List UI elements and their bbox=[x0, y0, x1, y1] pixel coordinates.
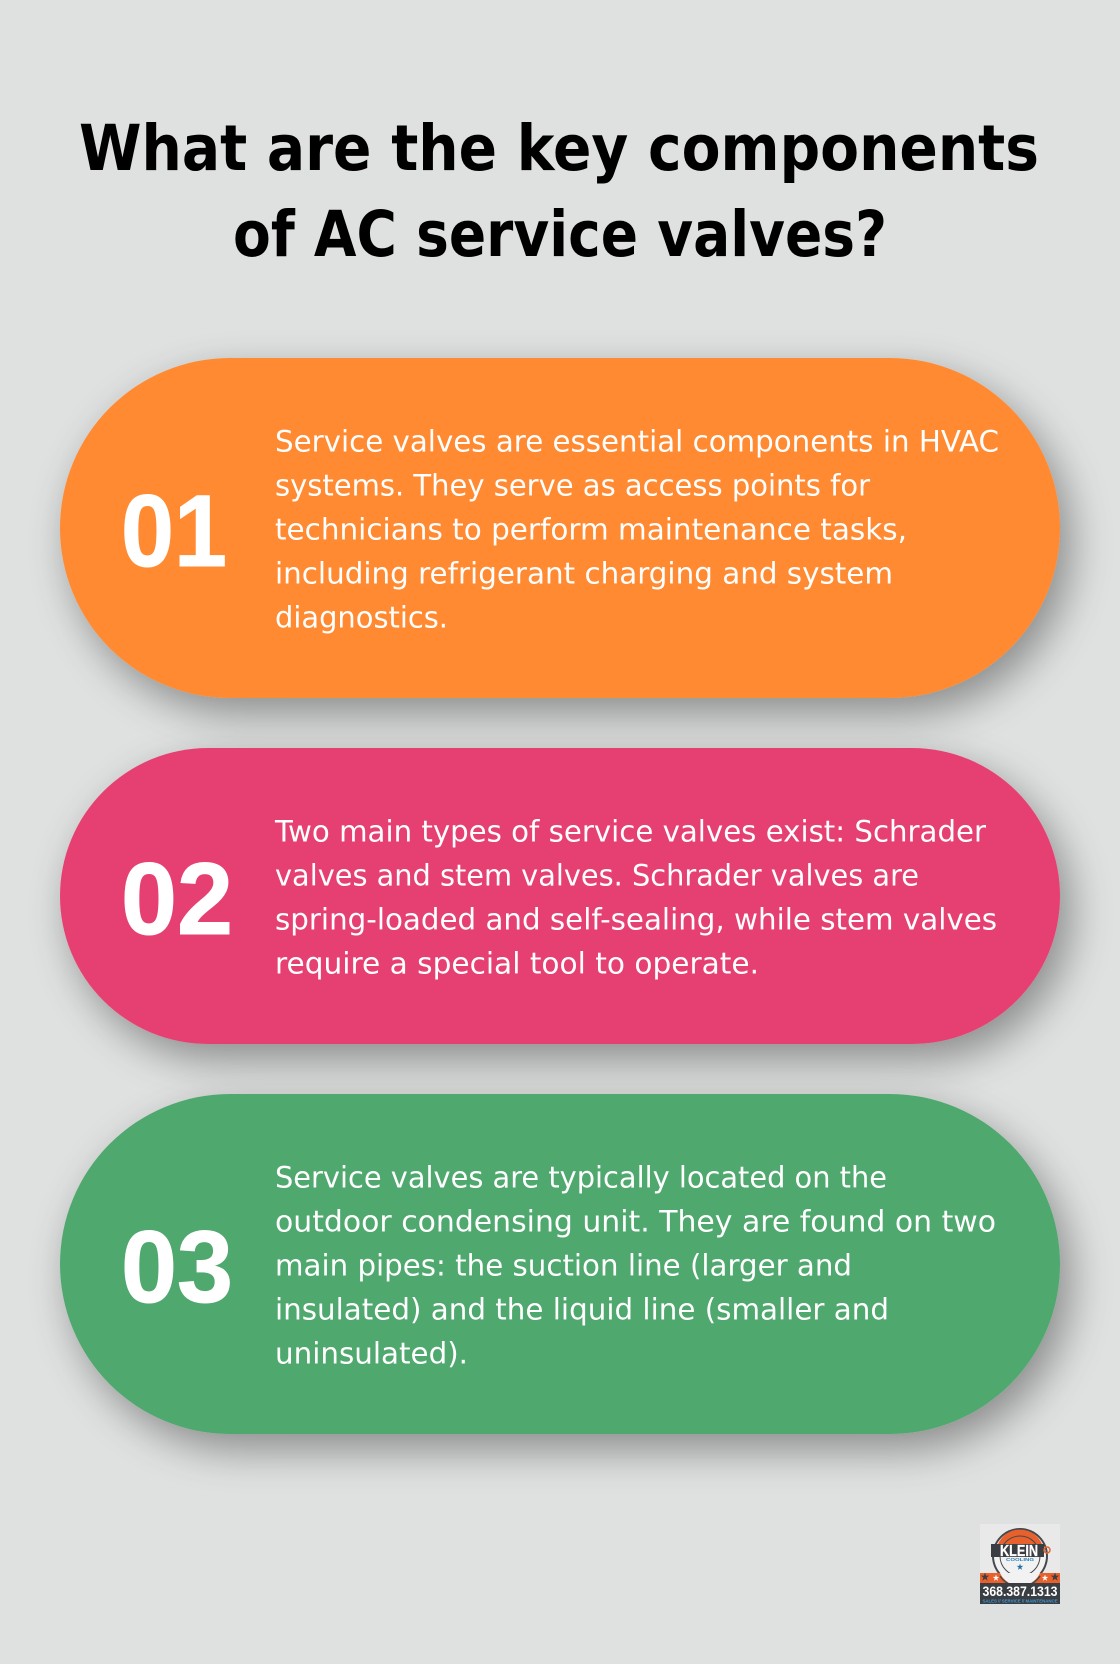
text block: step 01: systems. They serve as access points for bbox=[275, 468, 870, 502]
icon: company logo: 368.387.1313 bbox=[982, 1584, 1058, 1599]
panel: step 03 bbox=[60, 1094, 1060, 1434]
text block: step 03 bbox=[275, 1160, 996, 1370]
text block: step 01 bbox=[275, 424, 999, 634]
text block: step 02 bbox=[274, 814, 997, 980]
number 02: 02 bbox=[121, 842, 233, 956]
icon: company logo: KLEIN bbox=[1000, 1543, 1038, 1560]
text block: step 01: Service valves are essential components in HVAC bbox=[275, 424, 999, 458]
text block: step 03: main pipes: the suction line (larger and bbox=[275, 1248, 852, 1282]
text block: step 02: valves and stem valves. Schrader valves are bbox=[275, 858, 919, 892]
text block: step 01: including refrigerant charging and system bbox=[275, 556, 893, 590]
text block: step 03: outdoor condensing unit. They are found on two bbox=[275, 1204, 996, 1238]
text block: step 03: Service valves are typically located on the bbox=[275, 1160, 887, 1194]
text block: step 02: spring-loaded and self-sealing, while stem valves bbox=[275, 902, 997, 936]
text block: step 03: insulated) and the liquid line (smaller and bbox=[275, 1292, 889, 1326]
icon: company logo: SALES // SERVICE // MAINTENANCE bbox=[982, 1598, 1058, 1604]
text block: step 02: Two main types of service valves exist: Schrader bbox=[274, 814, 986, 848]
panel: step 02 bbox=[60, 748, 1060, 1044]
text block: step 01: diagnostics. bbox=[275, 600, 448, 634]
number 03: 03 bbox=[121, 1210, 233, 1324]
text block: step 02: require a special tool to operate. bbox=[275, 946, 759, 980]
number 01: 01 bbox=[121, 474, 227, 588]
icon: company logo bbox=[980, 1524, 1060, 1604]
icon: company logo: COOLING bbox=[1006, 1557, 1035, 1562]
title: of AC service valves? bbox=[233, 198, 887, 271]
text block: step 01: technicians to perform maintenance tasks, bbox=[275, 512, 907, 546]
title bbox=[79, 112, 1039, 271]
title: What are the key components bbox=[79, 112, 1039, 185]
panel: step 01 bbox=[60, 358, 1060, 698]
text block: step 03: uninsulated). bbox=[275, 1336, 468, 1370]
